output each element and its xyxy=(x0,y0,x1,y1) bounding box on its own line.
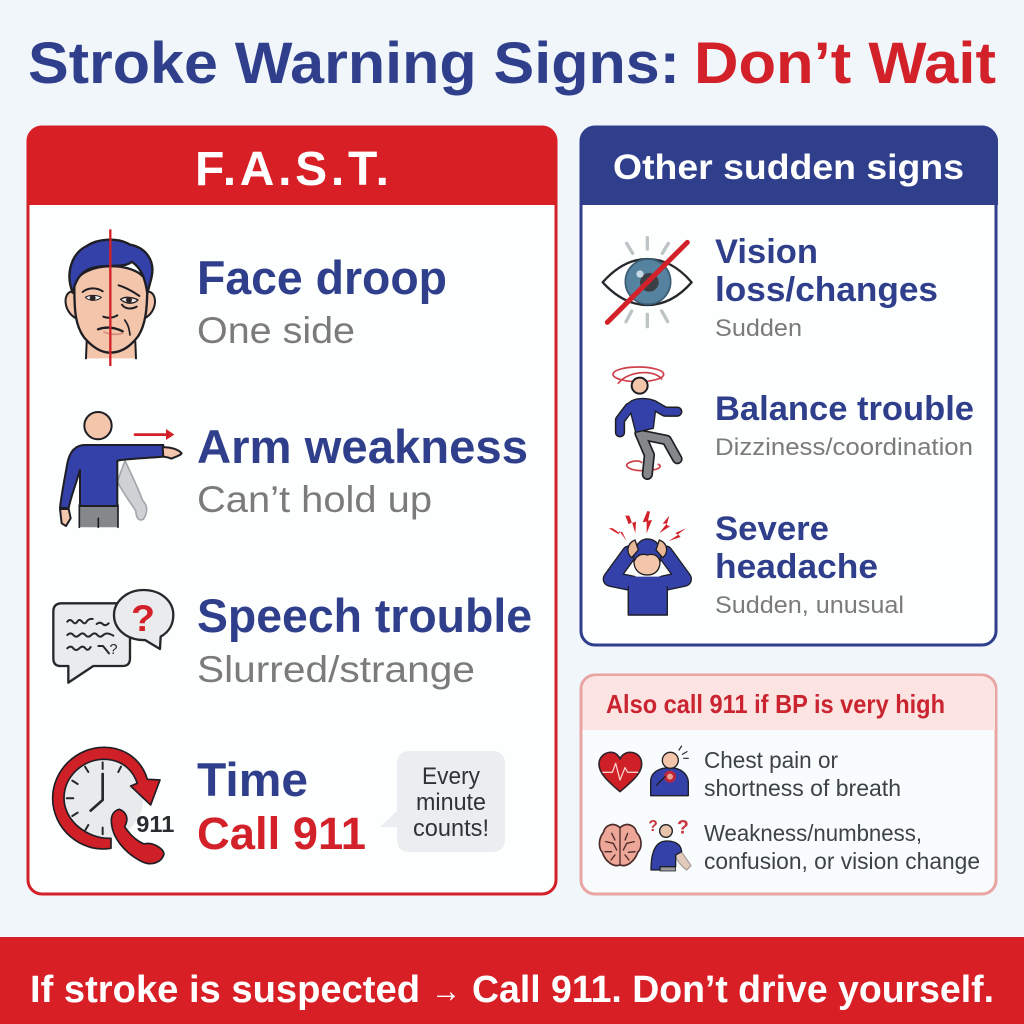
text: face droop: Face droop xyxy=(197,251,447,304)
icon: clock with 911 phone xyxy=(53,747,174,864)
title xyxy=(28,31,996,96)
callout: every minute counts xyxy=(380,751,505,852)
text: severe headache: headache xyxy=(715,548,878,586)
icon: clock with 911 phone: 911 xyxy=(136,811,174,837)
text: arm weakness xyxy=(197,420,528,520)
text: weakness confusion: Weakness/numbness, xyxy=(704,820,922,846)
text: speech trouble xyxy=(197,589,532,690)
icon: brain xyxy=(599,825,641,866)
also call header xyxy=(582,676,995,730)
text: severe headache xyxy=(715,510,904,619)
text: chest pain: shortness of breath xyxy=(704,775,901,801)
bottom banner xyxy=(0,937,1024,1024)
text: chest pain xyxy=(704,747,901,801)
bottom banner: Call 911. Don’t drive yourself. xyxy=(472,969,994,1011)
text: time call 911: Call 911 xyxy=(197,808,366,859)
text: chest pain: Chest pain or xyxy=(704,747,838,773)
text: severe headache: Sudden, unusual xyxy=(715,592,904,619)
callout: every minute counts: minute xyxy=(416,789,486,816)
text: face droop xyxy=(197,251,447,351)
panel: also call 911 xyxy=(581,675,996,894)
text: speech trouble: Speech trouble xyxy=(197,589,532,642)
F.A.S.T. header: F.A.S.T. xyxy=(195,143,389,196)
other signs header xyxy=(580,127,998,205)
also call header: Also call 911 if BP is very high xyxy=(606,689,945,719)
icon: speech trouble: ? xyxy=(109,642,117,658)
title: Don’t Wait xyxy=(694,31,996,96)
text: weakness confusion xyxy=(704,820,980,874)
text: arm weakness: Can’t hold up xyxy=(197,479,432,520)
text: severe headache: Severe xyxy=(715,510,829,548)
title: Stroke Warning Signs: xyxy=(28,31,680,96)
icon: person with chest pain xyxy=(651,746,688,796)
icon: severe headache xyxy=(609,511,686,616)
icon: confused person: ? xyxy=(648,818,658,835)
bottom banner: If stroke is suspected xyxy=(30,969,420,1011)
text: weakness confusion: confusion, or vision change xyxy=(704,848,980,874)
text: balance trouble: Dizziness/coordination xyxy=(715,434,973,461)
text: vision loss: Sudden xyxy=(715,315,802,342)
icon: heart xyxy=(599,752,642,792)
icon: confused person: ? xyxy=(677,818,689,839)
F.A.S.T. header xyxy=(27,127,557,205)
text: speech trouble: Slurred/strange xyxy=(197,649,475,690)
icon: vision loss xyxy=(603,238,692,327)
text: vision loss xyxy=(715,233,938,342)
panel: other sudden signs xyxy=(580,127,998,645)
text: time call 911: Time xyxy=(197,753,308,806)
icon: face droop xyxy=(66,229,155,366)
icon: speech trouble xyxy=(53,590,173,683)
text: vision loss: Vision xyxy=(715,233,818,271)
icon: balance trouble xyxy=(613,367,677,474)
icon: speech trouble: ? xyxy=(131,597,155,639)
panel: F.A.S.T. xyxy=(27,127,557,894)
text: face droop: One side xyxy=(197,310,355,351)
icon: confused person xyxy=(648,818,691,871)
other signs header: Other sudden signs xyxy=(613,148,964,187)
icon: arm weakness xyxy=(60,412,182,527)
callout: every minute counts: Every xyxy=(422,763,480,790)
callout: every minute counts: counts! xyxy=(413,815,489,842)
bottom banner: → xyxy=(431,972,461,1010)
text: arm weakness: Arm weakness xyxy=(197,420,528,473)
text: balance trouble: Balance trouble xyxy=(715,390,974,428)
text: balance trouble xyxy=(715,390,974,461)
text: vision loss: loss/changes xyxy=(715,271,938,309)
text: time call 911 xyxy=(197,753,366,859)
